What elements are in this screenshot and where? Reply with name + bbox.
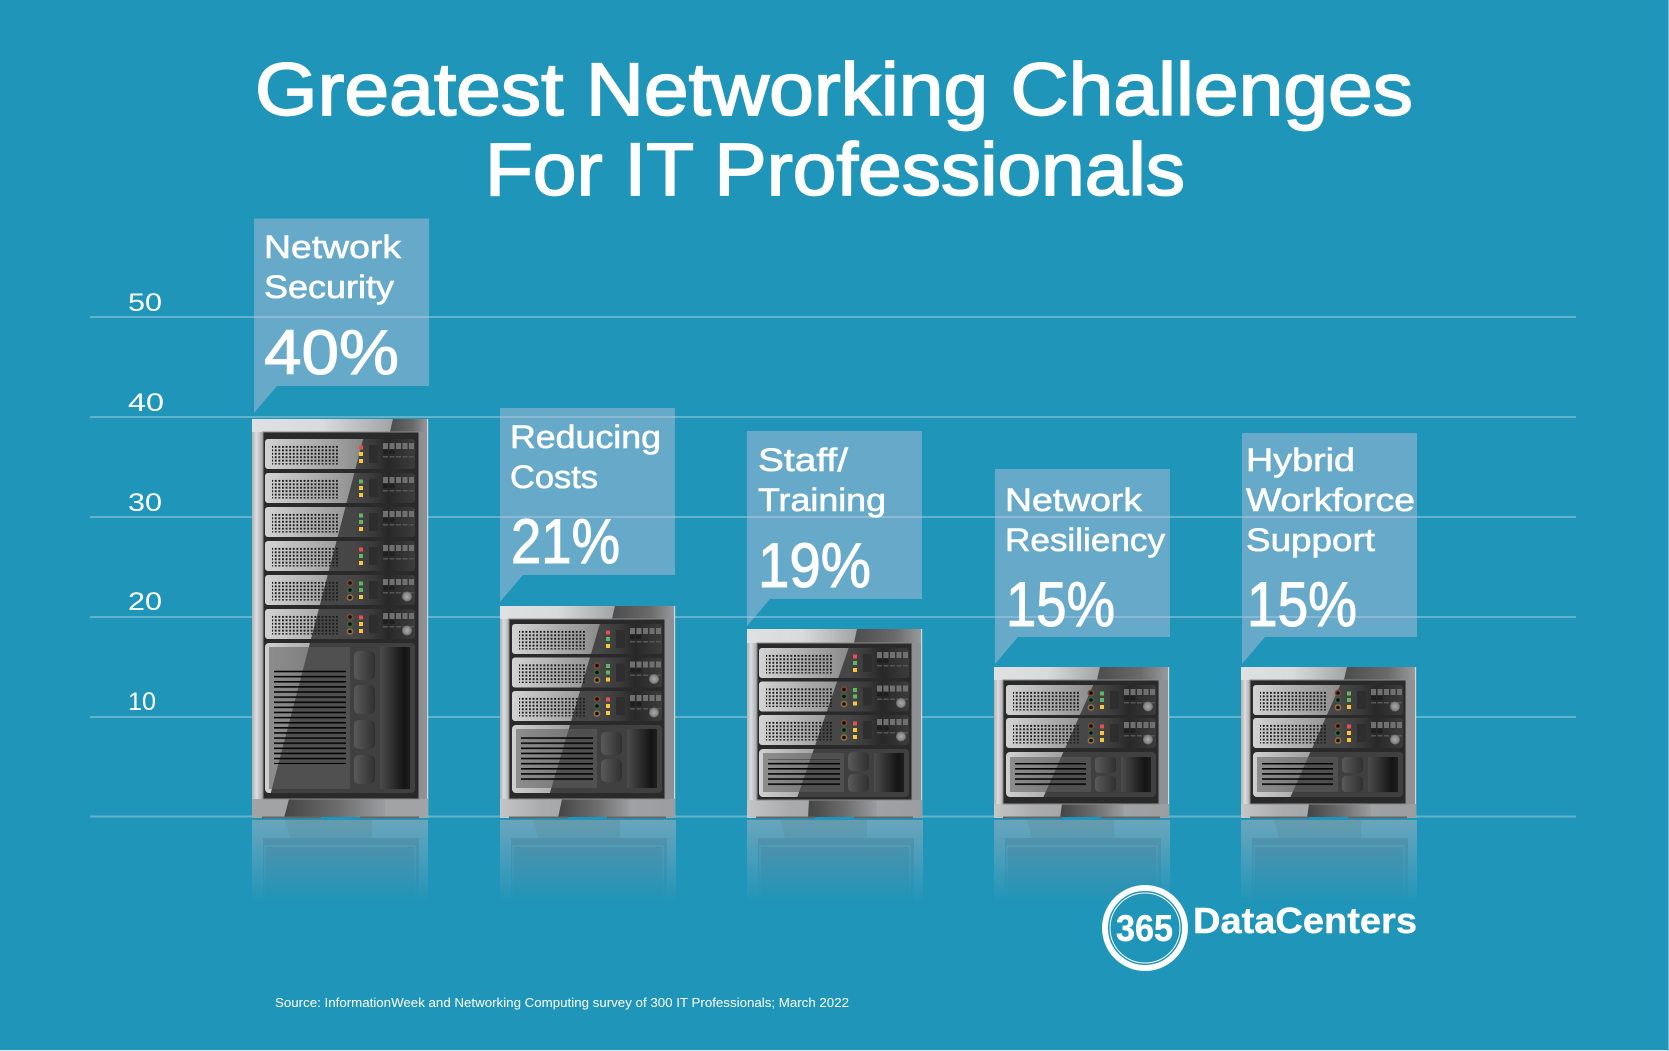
callout: Staff/Training 19%: Training (758, 482, 886, 518)
callout: Hybrid Workforce Support 15%: Support (1246, 522, 1375, 558)
y axis labels: 20 (128, 588, 162, 616)
callout: Network Resiliency 15%: 15% (1006, 570, 1115, 640)
callout: Network Security 40%: Security (264, 269, 394, 305)
server rack: Staff/Training (747, 629, 922, 819)
server rack: Hybrid Workforce Support (1241, 667, 1416, 819)
callout: Reducing Costs 21%: 21% (511, 507, 620, 577)
y axis labels: 10 (128, 688, 156, 716)
callout: Staff/Training 19% (747, 431, 922, 626)
callout: Reducing Costs 21%: Reducing (510, 419, 661, 455)
callout: Network Security 40%: 40% (264, 318, 399, 388)
logo: 365 DataCenters (1105, 888, 1417, 968)
callout: Reducing Costs 21% (500, 408, 675, 602)
source note: Source: InformationWeek and Networking Computing survey of 300 IT Professionals; March 2022 (275, 995, 849, 1010)
y axis labels (128, 289, 164, 716)
callout: Network Resiliency 15% (995, 469, 1170, 664)
logo: 365 DataCenters: 365 (1116, 908, 1173, 949)
server rack: Reducing Costs (500, 606, 675, 819)
callout: Staff/Training 19%: 19% (758, 531, 871, 601)
server reflections (252, 820, 1417, 896)
callout: Network Resiliency 15%: Network (1005, 482, 1143, 518)
callout: Network Security 40%: Network (264, 229, 402, 265)
y axis labels: 30 (128, 489, 162, 517)
callout: Network Security 40% (254, 218, 429, 413)
callout: Network Resiliency 15%: Resiliency (1005, 522, 1165, 558)
callout: Hybrid Workforce Support 15%: Workforce (1246, 482, 1415, 518)
server rack: Network Security (252, 419, 428, 819)
callout: Hybrid Workforce Support 15%: 15% (1247, 570, 1357, 640)
y axis labels: 40 (128, 389, 164, 417)
title: Greatest Networking Challenges (255, 48, 1413, 131)
y axis labels: 50 (128, 289, 162, 317)
callout: Hybrid Workforce Support 15% (1242, 433, 1417, 664)
title: For IT Professionals (485, 128, 1185, 211)
title (255, 48, 1413, 211)
callout: Staff/Training 19%: Staff/ (758, 442, 848, 478)
callout: Hybrid Workforce Support 15%: Hybrid (1246, 442, 1355, 478)
logo: 365 DataCenters: DataCenters (1193, 900, 1417, 941)
chart grid lines (90, 317, 1576, 816)
callout: Reducing Costs 21%: Costs (510, 459, 598, 495)
server rack: Network Resiliency (994, 667, 1169, 819)
